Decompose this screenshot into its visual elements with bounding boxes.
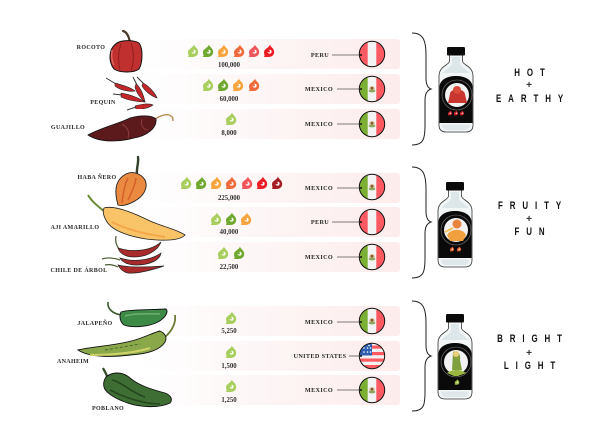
origin: Mexico: MEXICO [305,319,333,326]
icon: poblano pepper [103,368,171,407]
heat rating: 5,250 [221,312,237,335]
heat rating: 60,000: 60,000 [220,96,239,103]
heat rating: 100,000: 100,000 [218,62,241,69]
label: Habanero: HABA ÑERO [78,173,116,181]
origin: Mexico: MEXICO [305,185,333,192]
title: bright + light: LIGHT [504,360,562,372]
icon: hot sauce bottle, orange [438,182,472,267]
icon: habanero pepper [116,157,146,206]
label: Jalapeno: JALAPEÑO [77,319,113,327]
origin: United States: UNITED STATES [294,353,347,360]
origin: Mexico [305,111,385,137]
origin: Mexico: MEXICO [305,121,333,128]
origin: Mexico [305,76,385,102]
row: guajillo [51,109,400,141]
title: bright + light: + [526,348,532,359]
heat rating: 1,250 [221,380,237,404]
icon: pequin peppers [106,77,157,110]
row: habanero [78,157,400,206]
row: chile de arbol [51,236,400,274]
title: fruity + fun [498,200,568,238]
title: fruity + fun: FRUITY [498,200,568,212]
icon: aji amarillo pepper [88,195,185,240]
icon: hot sauce bottle, green [438,314,472,399]
heat rating: 1,500 [221,346,237,370]
label: Poblano: POBLANO [92,406,124,412]
icon: guajillo pepper [88,115,173,141]
title: hot + earthy: + [526,80,532,91]
icon: rocoto pepper [110,31,142,72]
origin: Mexico: MEXICO [305,387,333,394]
origin: Peru: PERU [311,52,329,59]
label: Aji Amarillo: AJI AMARILLO [51,225,99,231]
icon: hot sauce bottle, red [439,47,473,132]
heat rating: 225,000: 225,000 [218,195,241,202]
origin: Mexico: MEXICO [305,86,333,93]
heat rating: 1,500: 1,500 [221,363,237,370]
heat rating: 5,250: 5,250 [221,328,237,335]
row: aji amarillo [51,195,400,240]
icon: chile de arbol peppers [102,236,164,273]
origin: Mexico [305,377,385,403]
heat rating: 100,000 [188,44,274,69]
icon: jalapeno pepper [108,302,167,327]
brace [412,33,431,145]
label: Rocoto: ROCOTO [77,45,105,51]
heat rating: 22,500 [218,246,244,271]
heat rating: 22,500: 22,500 [220,264,239,271]
origin: Mexico [305,244,385,270]
origin: Peru [311,209,385,235]
brace [412,167,431,278]
heat rating: 40,000 [211,212,251,236]
label: Guajillo: GUAJILLO [51,125,85,131]
origin: Mexico [305,174,385,200]
title: fruity + fun: + [526,214,532,225]
row: anaheim [57,315,400,371]
icon: anaheim pepper [78,315,175,356]
heat rating: 60,000 [203,78,259,103]
title: hot + earthy [496,67,570,105]
panel: fruity and fun group [51,157,568,278]
panel: hot and earthy group [51,31,570,145]
row: rocoto [77,31,400,72]
heat rating: 40,000: 40,000 [220,229,239,236]
title: hot + earthy: HOT [514,67,552,79]
heat rating: 8,000: 8,000 [221,130,237,137]
title: bright + light: BRIGHT [497,333,569,345]
origin: Mexico: MEXICO [305,254,333,261]
row: poblano [92,368,400,412]
origin: Peru [311,41,385,67]
title: fruity + fun: FUN [514,226,552,238]
heat rating: 1,250: 1,250 [221,397,237,404]
label: Anaheim: ANAHEIM [57,359,89,365]
origin: Peru: PERU [311,219,329,226]
row: pequin [90,74,400,110]
panel: bright and light group [57,301,569,412]
row: jalapeno [77,302,400,336]
heat rating: 8,000 [221,112,237,137]
title: bright + light [497,333,569,372]
origin: United States [294,343,385,369]
brace [412,301,431,411]
heat rating: 225,000 [181,176,282,202]
origin: Mexico [305,308,385,334]
label: Pequin: PEQUIN [90,100,116,106]
title: hot + earthy: EARTHY [496,93,570,105]
label: Chile de Arbol: CHILE DE ÁRBOL [51,266,107,274]
